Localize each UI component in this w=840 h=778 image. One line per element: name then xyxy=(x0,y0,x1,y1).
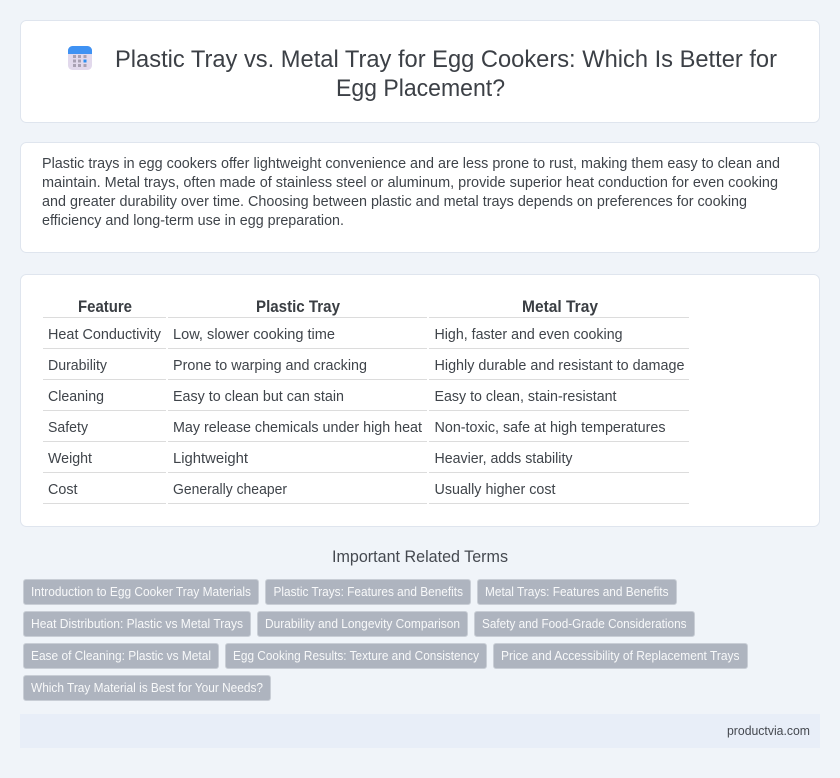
tag: Which Tray Material is Best for Your Needs? xyxy=(31,681,263,695)
title xyxy=(115,46,777,102)
tag xyxy=(494,644,748,668)
panel: comparison table xyxy=(20,274,820,526)
row: cleaning: Easy to clean, stain-resistant xyxy=(434,389,616,405)
icon: calendar tray xyxy=(68,46,92,70)
related term tags xyxy=(24,580,748,700)
table header row: Plastic Tray xyxy=(256,298,341,316)
row: durability: Highly durable and resistant to damage xyxy=(434,358,684,374)
row: cleaning: Easy to clean but can stain xyxy=(173,389,344,405)
heading: important related terms: Important Related Terms xyxy=(332,548,508,566)
summary text: and greater durability over time. Choosing between plastic and metal trays depends on preferences for cooking xyxy=(42,193,747,210)
row: durability: Durability xyxy=(48,358,108,374)
tag: Metal Trays: Features and Benefits xyxy=(485,585,668,599)
footer source text: productvia.com xyxy=(727,724,810,738)
tag xyxy=(258,612,468,636)
tag: Safety and Food-Grade Considerations xyxy=(482,617,686,631)
tag: Introduction to Egg Cooker Tray Materials xyxy=(31,585,251,599)
row: heat conductivity: High, faster and even cooking xyxy=(434,327,622,343)
tag xyxy=(226,644,486,668)
tag: Ease of Cleaning: Plastic vs Metal xyxy=(31,649,211,663)
tag xyxy=(266,580,470,604)
row: heat conductivity xyxy=(43,327,689,349)
tag: Price and Accessibility of Replacement Trays xyxy=(501,649,740,663)
footer bar xyxy=(20,714,820,748)
row: cost: Generally cheaper xyxy=(173,482,287,498)
table header row xyxy=(43,298,689,318)
tag: Egg Cooking Results: Texture and Consistency xyxy=(233,649,480,663)
panel: summary paragraph xyxy=(20,142,820,252)
row: weight: Lightweight xyxy=(173,451,248,467)
row: durability: Prone to warping and cracking xyxy=(173,358,367,374)
row: weight: Weight xyxy=(48,451,92,467)
panel: header xyxy=(20,20,820,122)
tag xyxy=(24,612,250,636)
row: cost: Usually higher cost xyxy=(434,482,556,498)
row: safety: Safety xyxy=(48,420,89,436)
summary text: efficiency and long-term use in egg preparation. xyxy=(42,212,344,229)
row: heat conductivity: Low, slower cooking time xyxy=(173,327,335,343)
table header row: Metal Tray xyxy=(522,298,599,316)
summary text: Plastic trays in egg cookers offer lightweight convenience and are less prone to rust, making them easy to clean and xyxy=(42,155,780,172)
row: safety: May release chemicals under high heat xyxy=(173,420,422,436)
row: cleaning: Cleaning xyxy=(48,389,104,405)
table header row: Feature xyxy=(78,298,132,316)
summary text: maintain. Metal trays, often made of stainless steel or aluminum, provide superior heat conduction for even cooking xyxy=(42,174,778,191)
tag: Heat Distribution: Plastic vs Metal Trays xyxy=(31,617,243,631)
row: cost: Cost xyxy=(48,482,78,498)
tag xyxy=(24,644,218,668)
tag xyxy=(478,580,676,604)
row: weight xyxy=(43,451,689,473)
title: Plastic Tray vs. Metal Tray for Egg Cookers: Which Is Better for xyxy=(115,46,777,73)
tag: Durability and Longevity Comparison xyxy=(265,617,460,631)
summary text xyxy=(42,155,780,229)
tag: Plastic Trays: Features and Benefits xyxy=(274,585,463,599)
tag xyxy=(24,580,258,604)
row: cost xyxy=(43,482,689,504)
row: heat conductivity: Heat Conductivity xyxy=(48,327,162,343)
row: cleaning xyxy=(43,389,689,411)
title: Egg Placement? xyxy=(336,75,505,102)
tag xyxy=(24,676,270,700)
row: weight: Heavier, adds stability xyxy=(434,451,573,467)
row: safety: Non-toxic, safe at high temperatures xyxy=(434,420,666,436)
row: durability xyxy=(43,358,689,380)
tag xyxy=(474,612,694,636)
row: safety xyxy=(43,420,689,442)
